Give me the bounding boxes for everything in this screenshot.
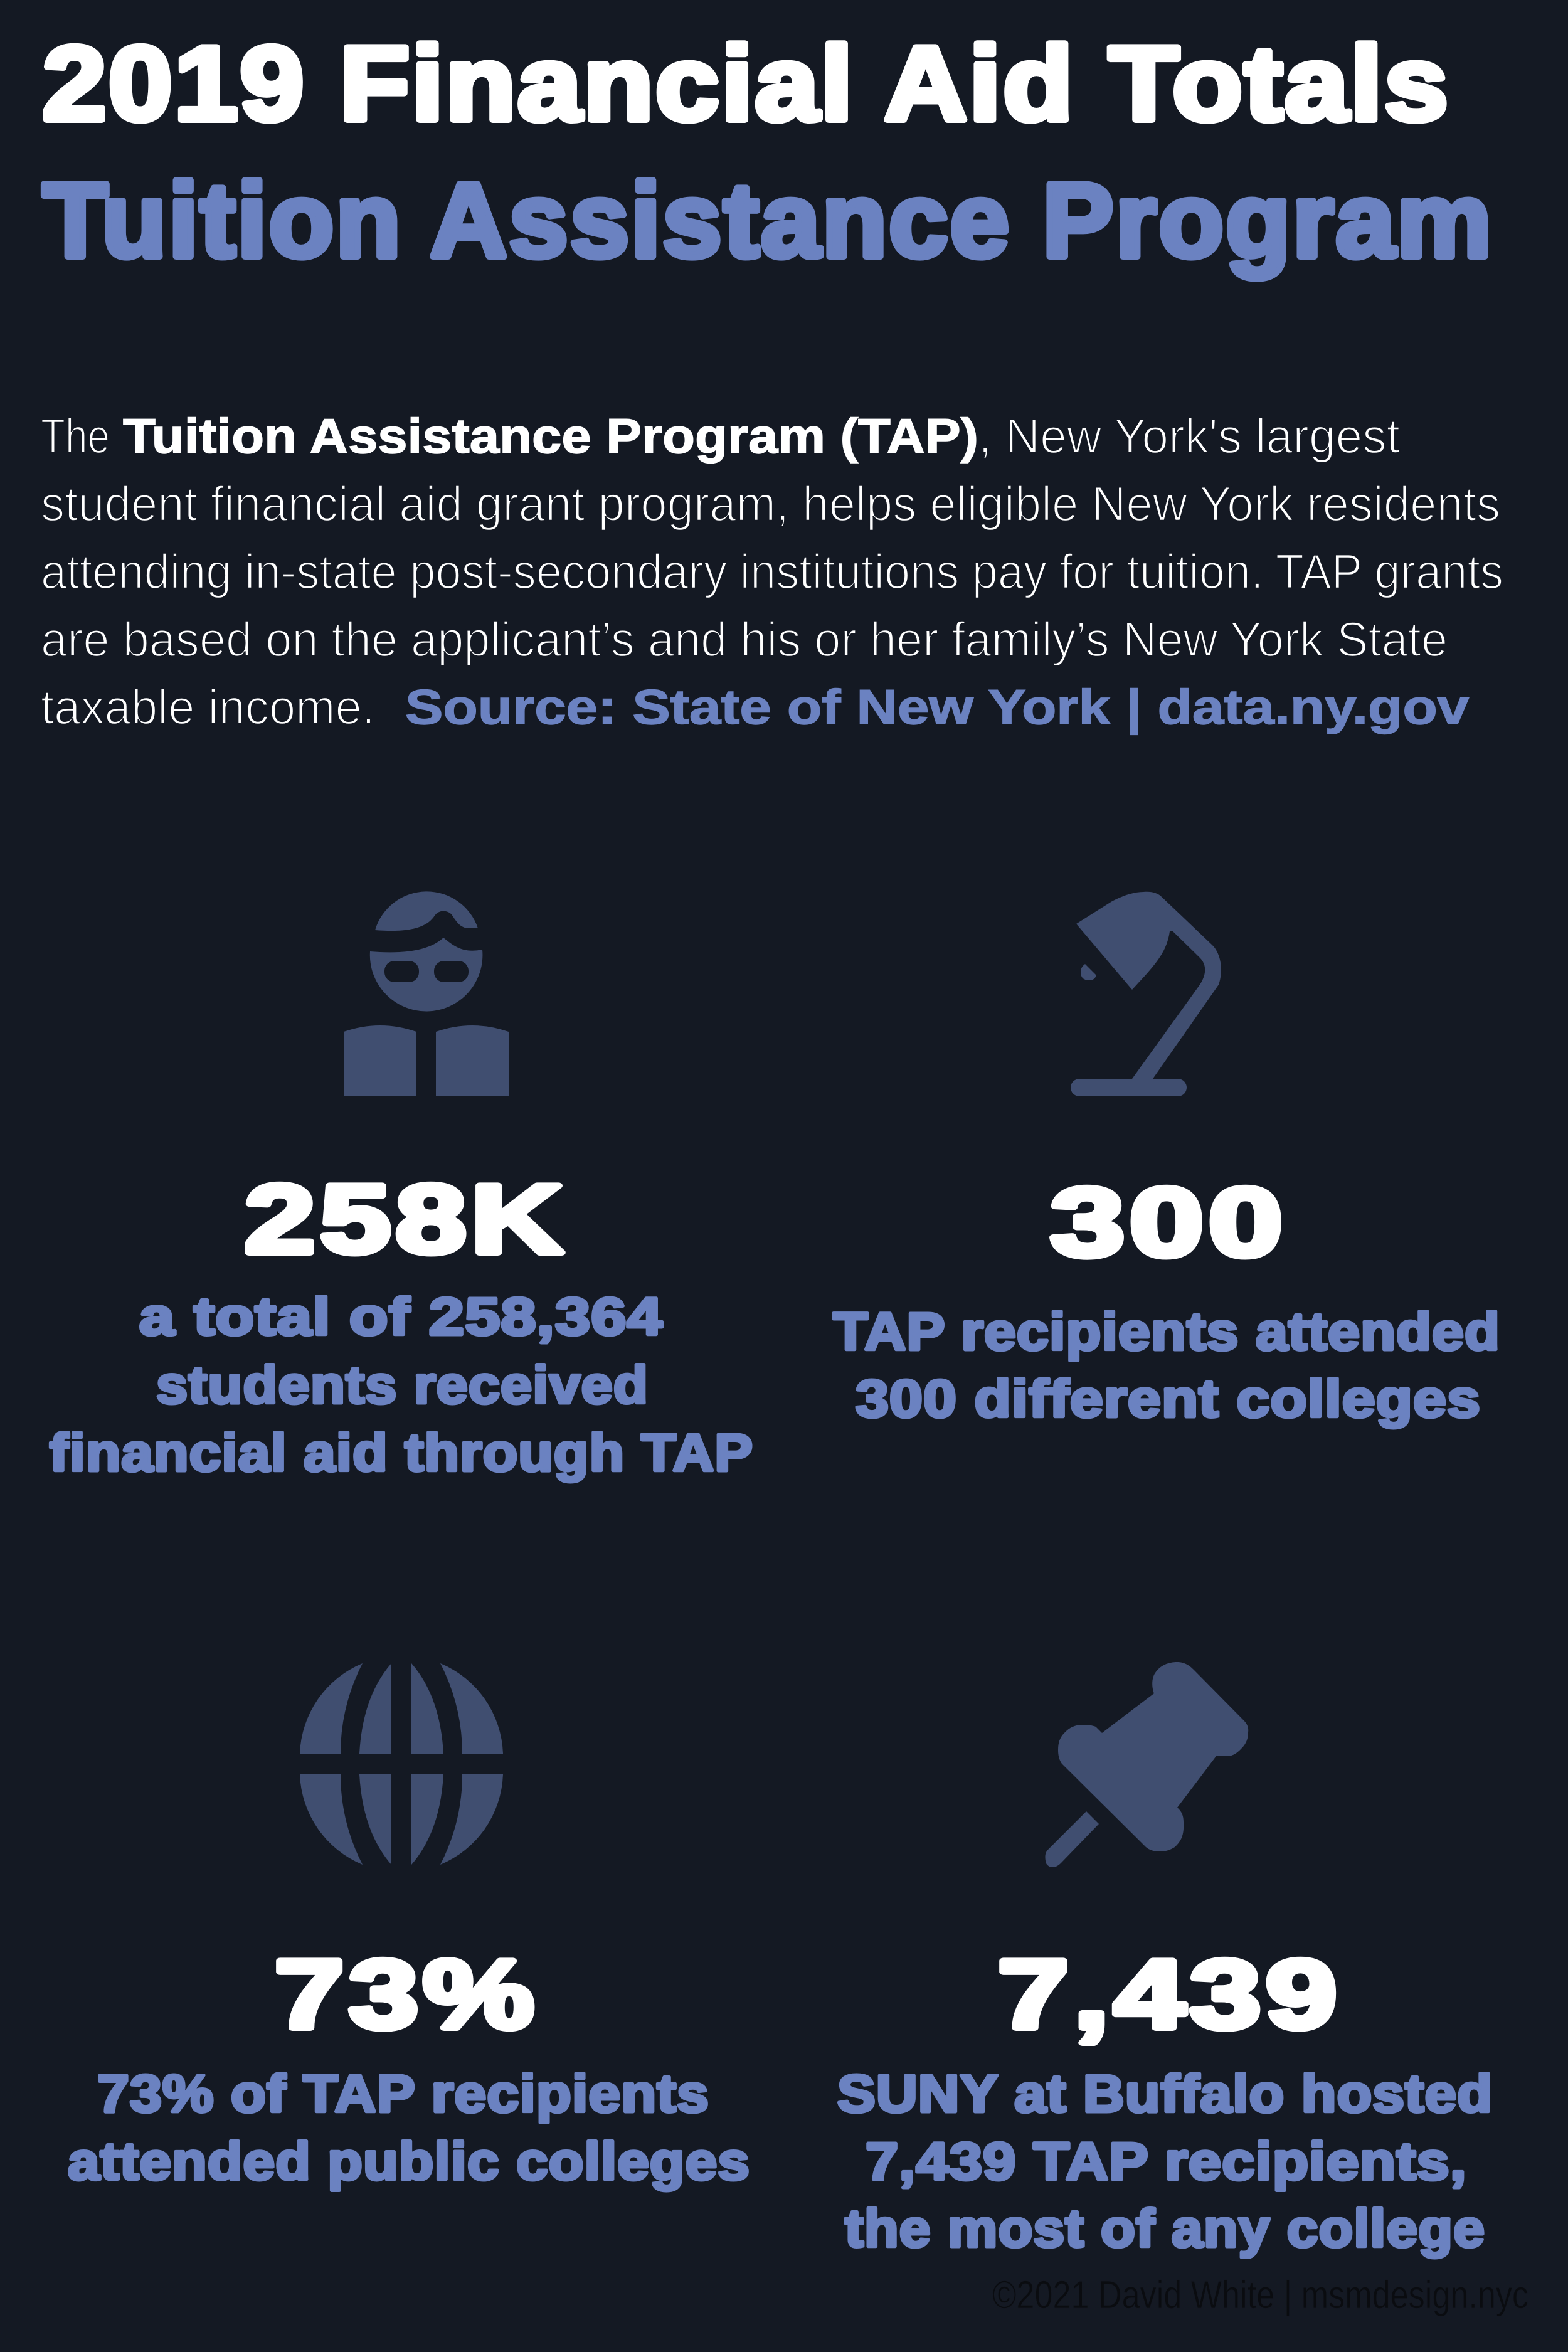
- intro paragraph: are based on the applicant’s and his or her family’s New York State: [41, 612, 1448, 667]
- caption: 7,439: 7,439 TAP recipients,: [866, 2132, 1467, 2191]
- caption: 300: TAP recipients attended: [833, 1302, 1500, 1361]
- caption: 7,439: [837, 2064, 1493, 2258]
- intro paragraph: Tuition Assistance Program (TAP): [123, 408, 978, 464]
- intro paragraph: [41, 408, 1503, 734]
- stat: 258K: 258K: [245, 1165, 568, 1273]
- caption: 300: 300 different colleges: [856, 1369, 1481, 1428]
- caption: 73%: attended public colleges: [68, 2132, 750, 2191]
- caption: 7,439: SUNY at Buffalo hosted: [837, 2064, 1493, 2123]
- icon: desk lamp: [1071, 892, 1221, 1096]
- stat: 73%: 73%: [275, 1940, 539, 2048]
- intro paragraph: Source: State of New York | data.ny.gov: [405, 679, 1470, 734]
- caption: 258K: financial aid through TAP: [50, 1423, 753, 1482]
- stat: 300: 300: [1051, 1168, 1288, 1276]
- intro paragraph: student financial aid grant program, helps eligible New York residents: [41, 476, 1500, 531]
- icon: globe: [300, 1663, 503, 1865]
- intro paragraph: taxable income.: [41, 679, 375, 734]
- intro paragraph: attending in-state post-secondary institutions pay for tuition. TAP grants: [41, 544, 1503, 599]
- intro paragraph: , New York's largest: [978, 408, 1400, 464]
- caption: 258K: [50, 1287, 753, 1482]
- title: 2019 Financial Aid Totals: [43, 24, 1450, 142]
- subtitle: Tuition Assistance Program: [43, 161, 1493, 279]
- stat: 7,439: 7,439: [998, 1940, 1342, 2048]
- icon: push pin: [1045, 1662, 1248, 1867]
- intro paragraph: The: [41, 408, 110, 464]
- caption: 300: [833, 1302, 1500, 1428]
- caption: 7,439: the most of any college: [845, 2199, 1485, 2258]
- caption: 258K: a total of 258,364: [139, 1287, 663, 1346]
- icon: student reading: [344, 891, 509, 1096]
- caption: 73%: 73% of TAP recipients: [97, 2064, 709, 2123]
- caption: 258K: students received: [156, 1355, 649, 1414]
- caption: 73%: [68, 2064, 750, 2191]
